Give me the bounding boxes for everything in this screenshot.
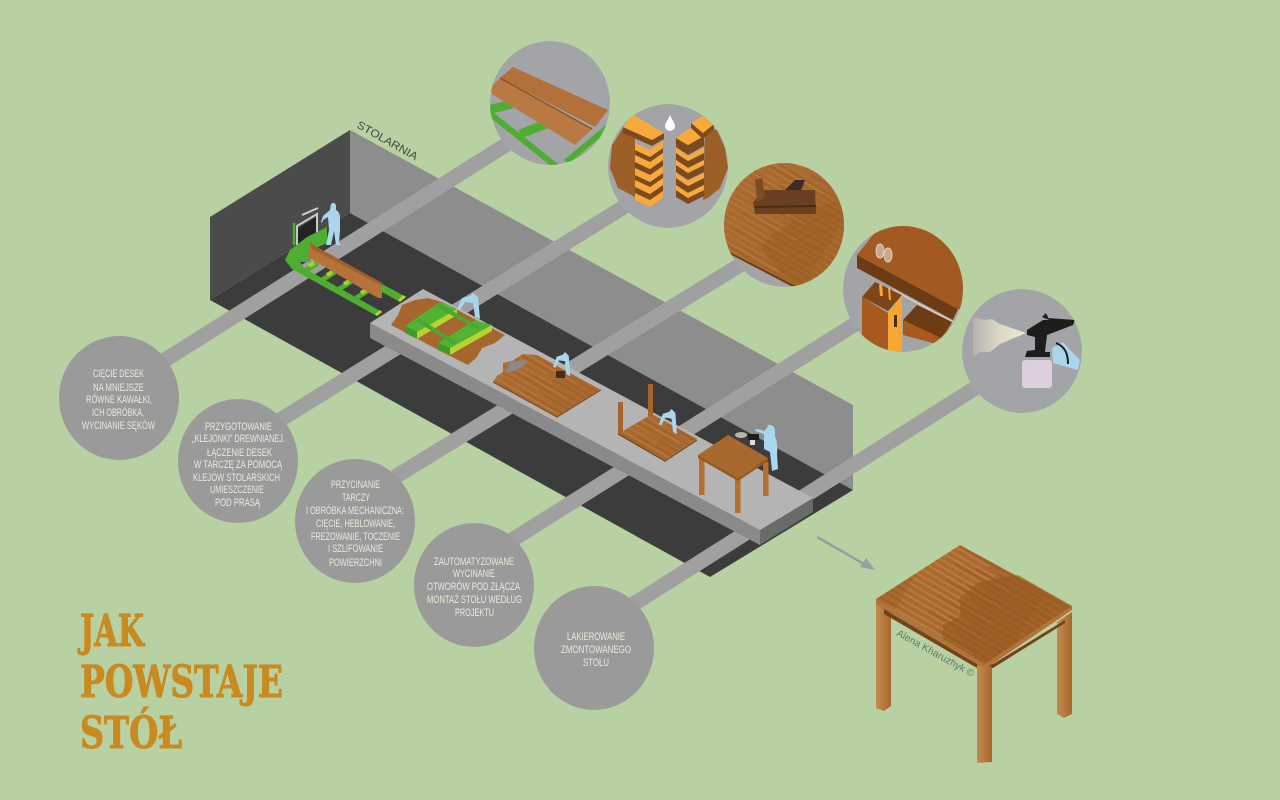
copyright: Alena Kharuzhyk © bbox=[895, 628, 977, 680]
circle: automated drilling and assembly: PROJEKTU bbox=[455, 607, 494, 619]
circle: trimming and machining: CIĘCIE, HEBLOWANIE, bbox=[316, 518, 395, 530]
circle: automated drilling and assembly: ZAUTOMATYZOWANE bbox=[434, 556, 514, 568]
top edge bbox=[876, 599, 1072, 669]
circle: trimming and machining: POWIERZCHNI bbox=[329, 557, 382, 569]
circle: planks on conveyor bbox=[488, 41, 610, 167]
leg: front bbox=[977, 665, 992, 763]
worker bbox=[457, 293, 480, 319]
circle: preparing glued panel: POD PRASĄ bbox=[215, 497, 260, 509]
circle: cutting boards: RÓWNE KAWAŁKI, bbox=[86, 393, 152, 406]
right joint body bbox=[703, 128, 728, 200]
unfinished patch bbox=[505, 360, 527, 373]
wood edge bbox=[728, 252, 795, 287]
parquet boards bbox=[391, 298, 505, 365]
circle: cutting boards: CIĘCIE DESEK bbox=[93, 368, 144, 380]
table leg bbox=[618, 402, 623, 434]
left joint top slab bbox=[623, 115, 664, 146]
title bbox=[77, 606, 283, 759]
station 4: panel with legs bbox=[618, 384, 697, 461]
circle: automated drilling and assembly bbox=[414, 523, 534, 647]
station 2: glued panel in press bbox=[391, 293, 505, 365]
circle: cutting boards: ICH OBRÓBKA, bbox=[92, 406, 144, 419]
circle: lacquering bbox=[534, 586, 654, 710]
darker wood section bbox=[764, 200, 844, 286]
circle: spray gun bbox=[962, 289, 1082, 413]
circle: preparing glued panel bbox=[178, 399, 298, 523]
workshop label: STOLARNIA bbox=[355, 119, 420, 163]
station 3: panel being planed bbox=[493, 352, 601, 417]
connector bands bbox=[165, 141, 980, 605]
trigger bbox=[1056, 343, 1068, 364]
circle: lacquering: ZMONTOWANEGO bbox=[561, 644, 631, 656]
finished table bbox=[876, 545, 1072, 763]
darker panel section bbox=[943, 575, 1072, 664]
circle: trimming and machining: TARCZY bbox=[342, 492, 370, 504]
spray cone bbox=[973, 317, 1026, 357]
circle: trimming and machining: FREZOWANIE, TOCZENIE bbox=[311, 531, 400, 543]
panel bbox=[618, 414, 697, 460]
station 1: saw with conveyor bbox=[285, 203, 406, 316]
title: STÓŁ bbox=[80, 706, 182, 759]
panel edge bbox=[618, 434, 697, 461]
table underside bbox=[857, 226, 970, 310]
arrow to finished table bbox=[817, 537, 875, 570]
dowel holes bbox=[876, 244, 892, 262]
rail bbox=[903, 305, 952, 345]
title: JAK bbox=[77, 606, 145, 657]
worker bbox=[321, 203, 341, 245]
wood surface bbox=[724, 163, 844, 286]
table top bbox=[876, 545, 1072, 664]
press beam A bbox=[405, 302, 457, 339]
circle: preparing glued panel: „KLEJONKI” DREWNIANEJ. bbox=[192, 433, 285, 445]
circle: trimming and machining: I OBRÓBKA MECHANICZNA: bbox=[306, 504, 404, 517]
spray gun bbox=[735, 432, 759, 445]
circle: mortise and tenon bbox=[843, 226, 970, 355]
worker bbox=[553, 352, 570, 376]
circle: preparing glued panel: UMIESZCZENIE bbox=[210, 484, 264, 496]
press beam B bbox=[438, 320, 492, 355]
left joint body bbox=[610, 128, 635, 197]
plane bbox=[556, 371, 565, 378]
leg bbox=[862, 282, 902, 355]
circle: trimming and machining: PRZYCINANIE bbox=[331, 479, 380, 491]
paint cup bbox=[1022, 360, 1052, 388]
plane bbox=[753, 178, 816, 214]
table leg bbox=[648, 384, 653, 416]
glue drop bbox=[665, 115, 675, 131]
circle: trimming and machining bbox=[295, 459, 415, 583]
right joint top blocks bbox=[676, 116, 714, 155]
press bars bbox=[418, 305, 478, 343]
worker bbox=[754, 425, 778, 471]
circle: hand plane on wood bbox=[724, 163, 844, 287]
circle: automated drilling and assembly: WYCINANIE bbox=[453, 568, 495, 580]
title: POWSTAJE bbox=[80, 657, 283, 708]
circle: cutting boards: NA MNIEJSZE bbox=[93, 382, 144, 394]
circle: lacquering: LAKIEROWANIE bbox=[567, 631, 625, 643]
table top bbox=[698, 435, 768, 478]
leg: left bbox=[876, 604, 891, 711]
leg: right bbox=[1057, 612, 1072, 718]
room: carpentry workshop bbox=[210, 130, 853, 577]
circle: trimming and machining: I SZLIFOWANIE bbox=[328, 543, 383, 555]
circle: cutting boards bbox=[59, 336, 179, 460]
worker bbox=[659, 409, 677, 434]
station 5: table being lacquered bbox=[698, 425, 778, 513]
hand bbox=[1052, 342, 1080, 370]
panel edge bbox=[493, 382, 601, 417]
circle: cutting boards: WYCINANIE SĘKÓW bbox=[82, 419, 155, 432]
left joint teeth bbox=[635, 141, 663, 207]
circle: preparing glued panel: KLEJÓW STOLARSKICH bbox=[193, 471, 280, 484]
conveyor rails bbox=[488, 104, 608, 167]
panel bbox=[493, 354, 601, 417]
circle: automated drilling and assembly: OTWORÓW POD ZŁĄCZA bbox=[427, 580, 520, 593]
circle: lacquering: STOŁU bbox=[583, 657, 609, 669]
apron bbox=[884, 609, 1065, 668]
right joint teeth bbox=[676, 148, 704, 204]
gun bbox=[1025, 313, 1075, 357]
saw frame bbox=[294, 208, 318, 245]
panel side bbox=[857, 255, 958, 320]
circle: preparing glued panel: PRZYGOTOWANIE bbox=[205, 421, 272, 433]
planks bbox=[490, 67, 608, 145]
production platform bbox=[370, 289, 813, 545]
plank bbox=[308, 242, 382, 298]
groove line bbox=[893, 290, 953, 322]
circle: preparing glued panel: ŁĄCZENIE DESEK bbox=[207, 447, 272, 459]
conveyor bbox=[285, 227, 406, 316]
circle: glued joints bbox=[608, 104, 728, 228]
circle: automated drilling and assembly: MONTAŻ STOŁU WEDŁUG bbox=[427, 593, 522, 606]
legs bbox=[699, 457, 768, 513]
circle: preparing glued panel: W TARCZĘ ZA POMOCĄ bbox=[194, 459, 282, 471]
